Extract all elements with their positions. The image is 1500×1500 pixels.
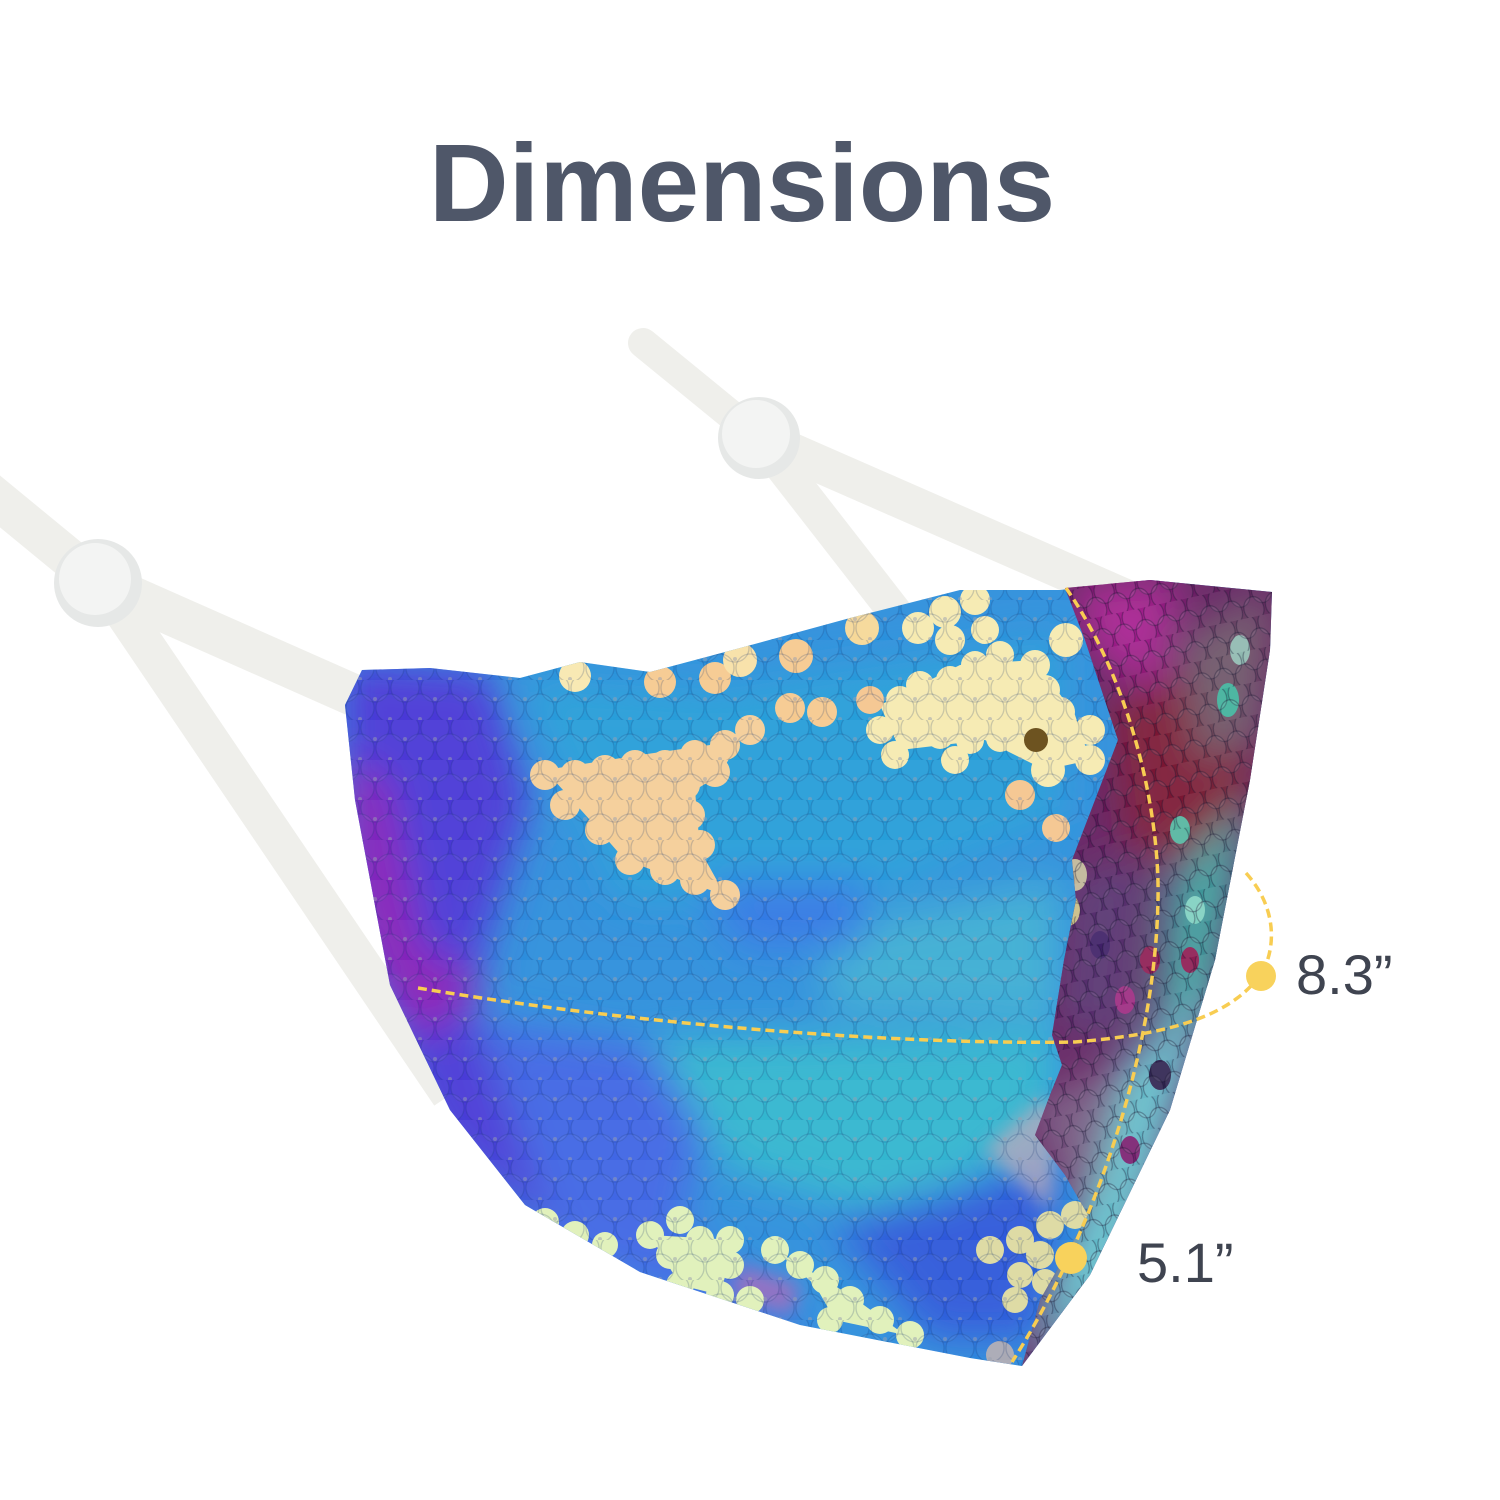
gold sequins: top edge xyxy=(559,611,879,727)
gold sequins: cheek patch xyxy=(530,715,765,910)
label: height value: 5.1” xyxy=(1137,1231,1234,1294)
title: Dimensions xyxy=(429,122,1055,245)
icon: width marker dot xyxy=(1246,961,1276,991)
highlight sequin patches xyxy=(730,1100,1060,1315)
side sequins: teal and rose accents xyxy=(1056,635,1250,1164)
mask front panel xyxy=(330,570,1290,1380)
mask side panel xyxy=(1022,580,1272,1366)
pale green underlay: lower patch xyxy=(650,1235,905,1335)
dimension: height measure line xyxy=(1012,588,1234,1362)
strap: rear ear loop xyxy=(643,343,1130,625)
strap: front ear loop xyxy=(0,485,450,1095)
pale sequins: lower right patch xyxy=(976,1201,1089,1369)
cream underlay: upper right cluster xyxy=(880,660,1090,770)
cream sequins: upper right cluster xyxy=(856,585,1105,842)
icon: rear strap toggle xyxy=(718,397,800,479)
pale green sequins: lower patch xyxy=(531,1206,924,1349)
icon: height marker dot xyxy=(1055,1242,1087,1274)
icon: front strap toggle xyxy=(54,539,142,627)
label: width value: 8.3” xyxy=(1296,943,1392,1006)
gold underlay: cheek patch xyxy=(557,734,740,890)
sequin mask xyxy=(330,570,1290,1380)
dimension: width measure line xyxy=(418,873,1392,1042)
